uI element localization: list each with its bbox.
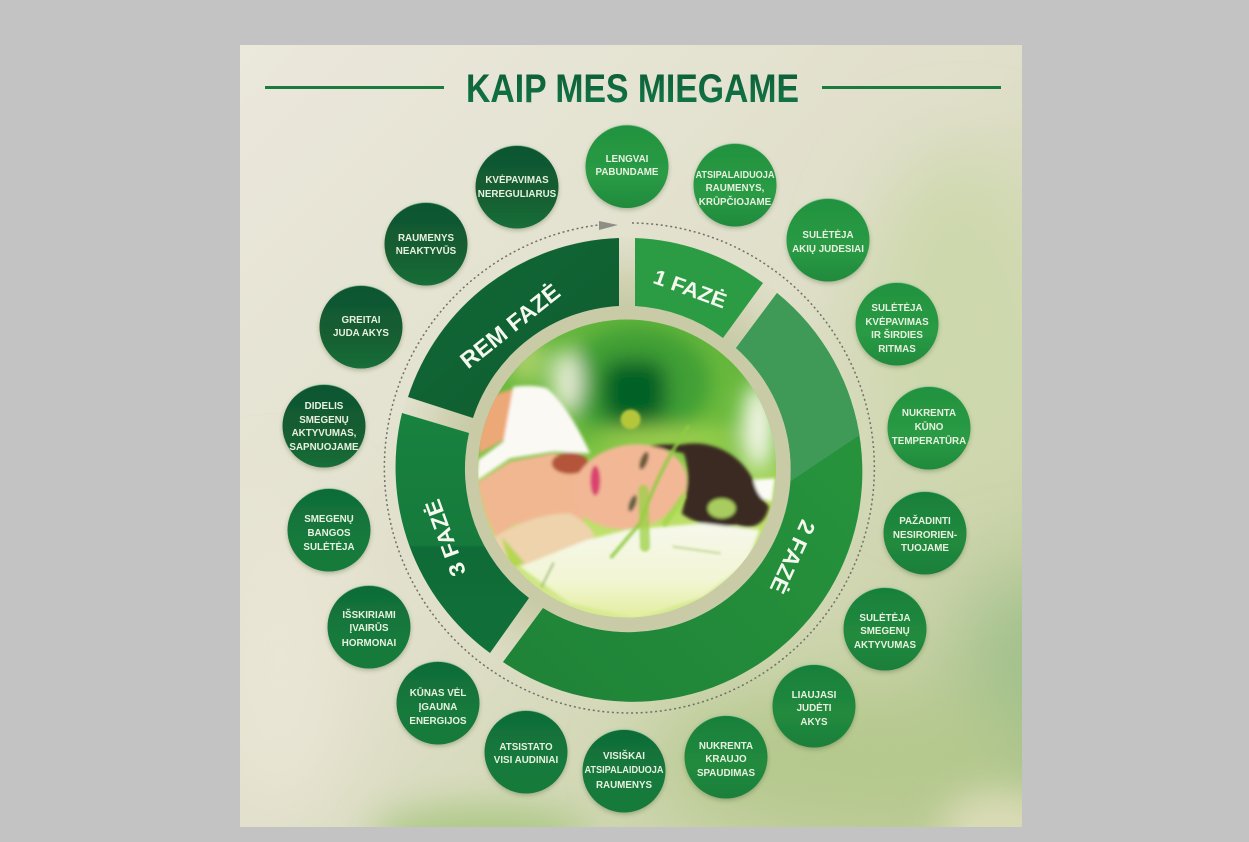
title rule right: [822, 86, 1001, 89]
bubble: sulėtėja kvėpavimas ir širdies ritmas: RITMAS: [878, 344, 916, 355]
bubble: nukrenta kraujo spaudimas: [684, 716, 768, 798]
bubble: visiškai atsipalaiduoja raumenys: VISIŠKAI: [603, 750, 645, 762]
bubble: didelis smegenų aktyvumas, sapnuojame: [282, 384, 366, 468]
bubble: atsipalaiduoja raumenys: ATSIPALAIDUOJA: [696, 170, 774, 181]
arrow: [599, 221, 618, 230]
bubble: didelis smegenų aktyvumas, sapnuojame: SAPNUOJAME: [289, 442, 359, 453]
bubble: liaujasi judėti akys: LIAUJASI: [792, 690, 837, 701]
bubble: kvėpavimas nereguliarus: [476, 146, 558, 228]
panel background: [240, 45, 1022, 827]
bubble: sulėtėja akių judesiai: [786, 198, 870, 282]
bubble: smegenų bangos sulėtėja: BANGOS: [307, 528, 351, 539]
bubble: nukrenta kūno temperatūra: TEMPERATŪRA: [892, 436, 966, 447]
bubble: sulėtėja kvėpavimas ir širdies ritmas: IR ŠIRDIES: [871, 329, 923, 341]
bubble: išskiriami įvairūs hormonai: [328, 586, 410, 668]
bubble: sulėtėja smegenų aktyvumas: SULĖTĖJA: [859, 613, 911, 624]
bubble: sulėtėja akių judesiai: AKIŲ JUDESIAI: [792, 244, 864, 255]
bubble: nukrenta kūno temperatūra: KŪNO: [915, 422, 944, 433]
bubble: greitai juda akys: JUDA AKYS: [333, 328, 389, 339]
bubble: liaujasi judėti akys: [772, 664, 856, 748]
bubble: atsipalaiduoja raumenys: KRŪPČIOJAME: [699, 196, 772, 208]
dotted cycle ring: [384, 223, 874, 713]
bubble: kūnas vėl įgauna energijos: KŪNAS VĖL: [410, 688, 466, 699]
bubble: raumenys neaktyvūs: [384, 202, 468, 286]
bubble: atsipalaiduoja raumenys: RAUMENYS,: [706, 183, 765, 194]
bubble: sulėtėja kvėpavimas ir širdies ritmas: [856, 282, 938, 366]
bubble: smegenų bangos sulėtėja: SMEGENŲ: [304, 514, 354, 525]
segment: phase 3: 3 FAZĖ: [420, 496, 471, 580]
bubble: smegenų bangos sulėtėja: [288, 488, 370, 572]
bubble: kūnas vėl įgauna energijos: [396, 662, 480, 744]
bubble: liaujasi judėti akys: JUDĖTI: [797, 703, 832, 714]
bubble: nukrenta kūno temperatūra: NUKRENTA: [902, 408, 956, 419]
bubble: išskiriami įvairūs hormonai: IŠSKIRIAMI: [342, 609, 396, 621]
bubble: pažadinti nesiorientuojame: [884, 492, 966, 574]
bubble: atsistato visi audiniai: ATSISTATO: [499, 742, 553, 753]
bubble: greitai juda akys: GREITAI: [341, 315, 381, 326]
segment: phase 2: [503, 293, 862, 702]
bubble: didelis smegenų aktyvumas, sapnuojame: SMEGENŲ: [299, 415, 349, 426]
bubble: išskiriami įvairūs hormonai: HORMONAI: [342, 638, 396, 649]
bubble: sulėtėja akių judesiai: SULĖTĖJA: [802, 230, 854, 241]
title rule left: [265, 86, 444, 89]
bubble: nukrenta kraujo spaudimas: NUKRENTA: [699, 741, 753, 752]
title: KAIP MES MIEGAME: [466, 67, 799, 111]
bubble: visiškai atsipalaiduoja raumenys: RAUMENYS: [596, 780, 652, 791]
bubble: kūnas vėl įgauna energijos: ENERGIJOS: [409, 716, 467, 727]
bubble: atsistato visi audiniai: VISI AUDINIAI: [494, 755, 558, 766]
bubble: liaujasi judėti akys: AKYS: [800, 717, 828, 728]
bubble: raumenys neaktyvūs: RAUMENYS: [398, 233, 454, 244]
bubble: sulėtėja kvėpavimas ir širdies ritmas: SULĖTĖJA: [871, 303, 923, 314]
bubble: pažadinti nesiorientuojame: TUOJAME: [901, 543, 949, 554]
bubble: atsistato visi audiniai: [484, 710, 568, 794]
segment: phase 1: 1 FAZĖ: [650, 266, 729, 313]
segment: phase 3: [396, 413, 529, 653]
bubble: visiškai atsipalaiduoja raumenys: ATSIPALAIDUOJA: [584, 765, 664, 776]
bubble: greitai juda akys: [320, 286, 402, 368]
bubble: sulėtėja smegenų aktyvumas: [844, 588, 926, 670]
photo: sleeping woman in grass: [478, 320, 776, 618]
bubble: sulėtėja smegenų aktyvumas: SMEGENŲ: [860, 626, 910, 637]
bubble: visiškai atsipalaiduoja raumenys: [582, 730, 666, 812]
bubble: raumenys neaktyvūs: NEAKTYVŪS: [396, 246, 457, 257]
bubble: pažadinti nesiorientuojame: PAŽADINTI: [899, 515, 951, 527]
segment: REM phase: [408, 238, 619, 418]
bubble: kvėpavimas nereguliarus: NEREGULIARUS: [478, 189, 557, 200]
bubble: kvėpavimas nereguliarus: KVĖPAVIMAS: [485, 175, 549, 186]
bubble: lengvai pabundame: LENGVAI: [606, 154, 649, 165]
bubble: sulėtėja smegenų aktyvumas: AKTYVUMAS: [854, 640, 916, 651]
bubble: nukrenta kraujo spaudimas: KRAUJO: [705, 754, 747, 765]
bubble: didelis smegenų aktyvumas, sapnuojame: AKTYVUMAS,: [292, 428, 357, 439]
segment: REM phase: REM FAZĖ: [455, 278, 565, 374]
ring backing: [396, 237, 858, 699]
bubble: kūnas vėl įgauna energijos: ĮGAUNA: [419, 702, 457, 713]
bubble: sulėtėja kvėpavimas ir širdies ritmas: KVĖPAVIMAS: [865, 317, 929, 328]
segment: phase 1: [635, 238, 763, 338]
bubble: smegenų bangos sulėtėja: SULĖTĖJA: [303, 542, 355, 553]
bubble: pažadinti nesiorientuojame: NESIRORIEN-: [893, 530, 957, 541]
bubble: išskiriami įvairūs hormonai: ĮVAIRŪS: [349, 623, 389, 634]
bubble: nukrenta kūno temperatūra: [888, 386, 970, 470]
bubble: lengvai pabundame: PABUNDAME: [596, 167, 659, 178]
cream ring around photo: [472, 314, 782, 624]
bubble: nukrenta kraujo spaudimas: SPAUDIMAS: [697, 768, 755, 779]
bubble: lengvai pabundame: [586, 125, 668, 208]
bubble: atsipalaiduoja raumenys: [694, 144, 776, 226]
segment: phase 2: 2 FAZĖ: [765, 516, 820, 597]
bubble: didelis smegenų aktyvumas, sapnuojame: DIDELIS: [305, 401, 344, 412]
